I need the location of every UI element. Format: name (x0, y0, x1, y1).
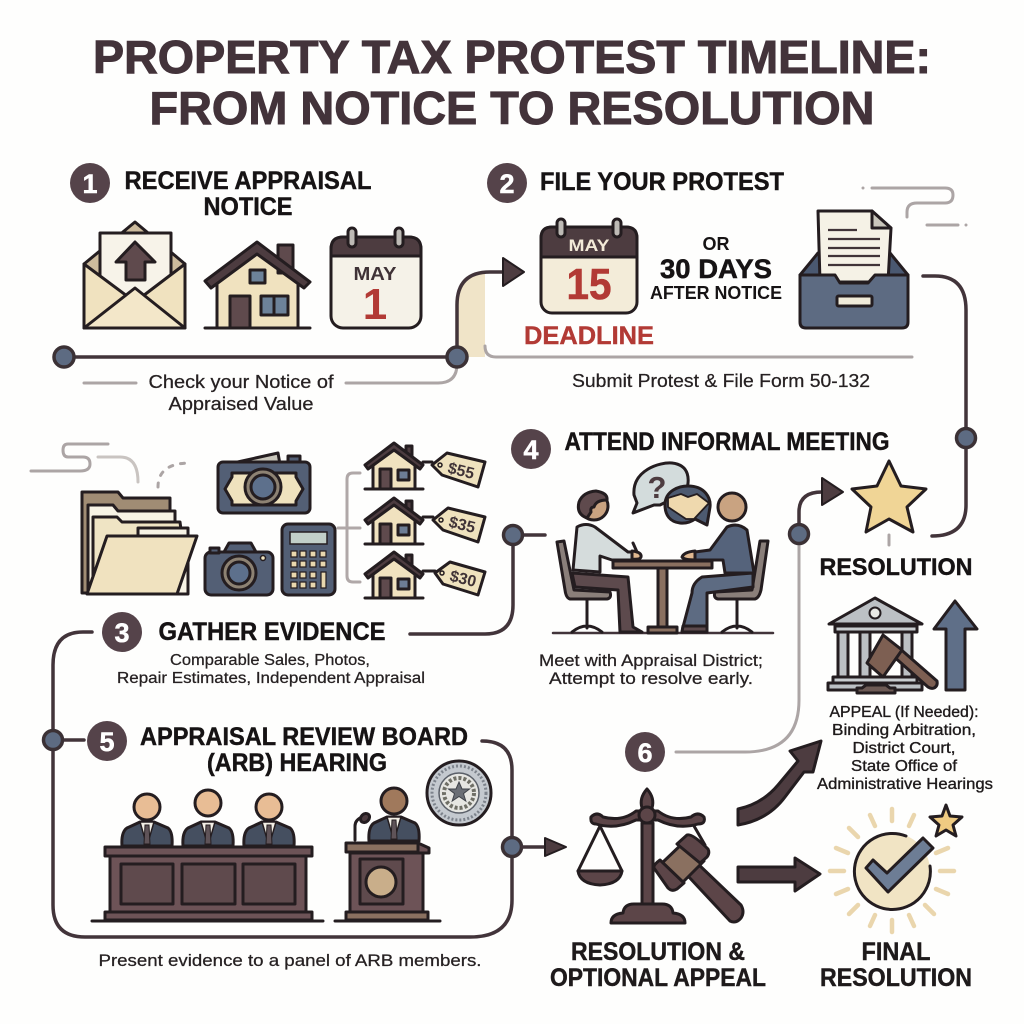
step 5 badge: 5 (99, 727, 115, 757)
icon: official seal (427, 761, 491, 825)
appeal details: District Court, (852, 740, 956, 757)
step 4 caption: Attempt to resolve early. (549, 670, 753, 688)
final resolution label: RESOLUTION (820, 964, 972, 992)
connector: step 5 to step 6 (502, 838, 566, 856)
deadline label: DEADLINE (524, 322, 654, 350)
icon: scales and gavel (578, 789, 743, 923)
step 1 heading: RECEIVE APPRAISAL (124, 167, 372, 195)
step 4 caption (539, 652, 763, 688)
step 1 caption: Appraised Value (168, 393, 314, 414)
appeal details (817, 704, 993, 793)
step 3 badge: 3 (114, 618, 130, 648)
icon: envelope (84, 222, 185, 328)
step 1 badge (70, 163, 110, 203)
deadline alternative: 30 DAYS (660, 254, 772, 284)
step 6 heading: OPTIONAL APPEAL (550, 964, 766, 992)
resolution label: RESOLUTION (820, 554, 972, 581)
icon: final resolution check (830, 805, 962, 932)
comparable home: $35 (365, 498, 485, 544)
step 5 heading: (ARB) HEARING (207, 749, 387, 777)
step 3 badge (102, 612, 142, 652)
table (613, 561, 712, 633)
arrow: up to appeal (738, 741, 821, 825)
step 3 heading: GATHER EVIDENCE (158, 618, 386, 646)
appeal details: APPEAL (If Needed): (830, 704, 978, 721)
person left (572, 491, 642, 632)
step 2 badge: 2 (499, 169, 515, 199)
comparable home: $30 (365, 552, 485, 598)
icon: courthouse and gavel (828, 598, 977, 693)
icon: calendar May 15: 15 (566, 260, 612, 309)
connector: step 2 to resolution (923, 276, 976, 536)
step 1 heading (124, 167, 372, 221)
handshake bubble (665, 486, 710, 525)
step 4 badge: 4 (523, 435, 539, 465)
icon: folder of documents (31, 444, 197, 594)
icon: file drawer (800, 188, 966, 328)
icon: calendar May 1 (331, 228, 421, 329)
icon: ARB panel (92, 790, 323, 921)
step 2 heading: FILE YOUR PROTEST (540, 168, 784, 196)
icon: calendar May 15: MAY (568, 236, 610, 255)
step 6 heading (550, 938, 766, 992)
step 2 caption: Submit Protest & File Form 50-132 (572, 370, 870, 391)
comparable home: $35: $35 (447, 514, 477, 537)
title: FROM NOTICE TO RESOLUTION (150, 82, 874, 134)
connector: step 3 to step 5 (44, 632, 512, 937)
connector: step 1 to step 2 (54, 258, 912, 383)
person right (682, 493, 754, 632)
step 5 heading: APPRAISAL REVIEW BOARD (140, 723, 468, 751)
step 4 badge (511, 429, 551, 469)
appeal details: Administrative Hearings (817, 776, 993, 793)
icon: calendar May 15 (541, 219, 637, 313)
comparable home: $55: $55 (446, 460, 476, 483)
title (93, 31, 931, 134)
chair right (714, 541, 768, 599)
final resolution label: FINAL (862, 938, 930, 966)
step 1 badge: 1 (82, 169, 98, 199)
step 5 badge (87, 721, 127, 761)
step 3 caption: Comparable Sales, Photos, (170, 652, 370, 669)
icon: camera (205, 543, 273, 595)
step 6 badge (625, 732, 665, 772)
deadline alternative: AFTER NOTICE (650, 282, 782, 303)
question bubble (633, 463, 688, 513)
step 3 caption: Repair Estimates, Independent Appraisal (117, 670, 425, 687)
comparable houses bracket (338, 473, 360, 582)
appeal details: State Office of (851, 758, 958, 775)
step 4 caption: Meet with Appraisal District; (539, 652, 763, 670)
connector: step 3 to step 4 (410, 526, 545, 634)
step 6 badge: 6 (637, 738, 653, 768)
final resolution label (820, 938, 972, 992)
icon: speaker at podium (335, 788, 440, 921)
step 2 badge (487, 163, 527, 203)
step 6 heading: RESOLUTION & (571, 938, 745, 966)
step 1 caption (148, 371, 334, 414)
icon: house (205, 242, 310, 328)
step 3 caption (117, 652, 425, 687)
step 5 heading (140, 723, 468, 777)
step 5 caption: Present evidence to a panel of ARB members. (98, 952, 482, 970)
icon: money camera (218, 453, 310, 513)
arrow: to final resolution (738, 858, 820, 891)
step 4 heading: ATTEND INFORMAL MEETING (564, 428, 890, 456)
deadline alternative (650, 234, 782, 303)
comparable home: $55 (365, 443, 485, 489)
icon: informal meeting (553, 463, 773, 633)
deadline alternative: OR (702, 234, 730, 254)
step 1 caption: Check your Notice of (148, 371, 334, 392)
question bubble: ? (648, 470, 666, 505)
icon: resolution star (852, 461, 926, 545)
title: PROPERTY TAX PROTEST TIMELINE: (93, 31, 931, 83)
step 1 heading: NOTICE (204, 193, 292, 221)
connector: step 6 to resolution (676, 478, 843, 752)
icon: calendar May 1: MAY (354, 264, 396, 284)
icon: calendar May 1: 1 (363, 280, 387, 329)
icon: calculator (282, 524, 335, 595)
comparable home: $30: $30 (448, 568, 478, 591)
appeal details: Binding Arbitration, (832, 722, 976, 739)
chair left (557, 541, 611, 599)
